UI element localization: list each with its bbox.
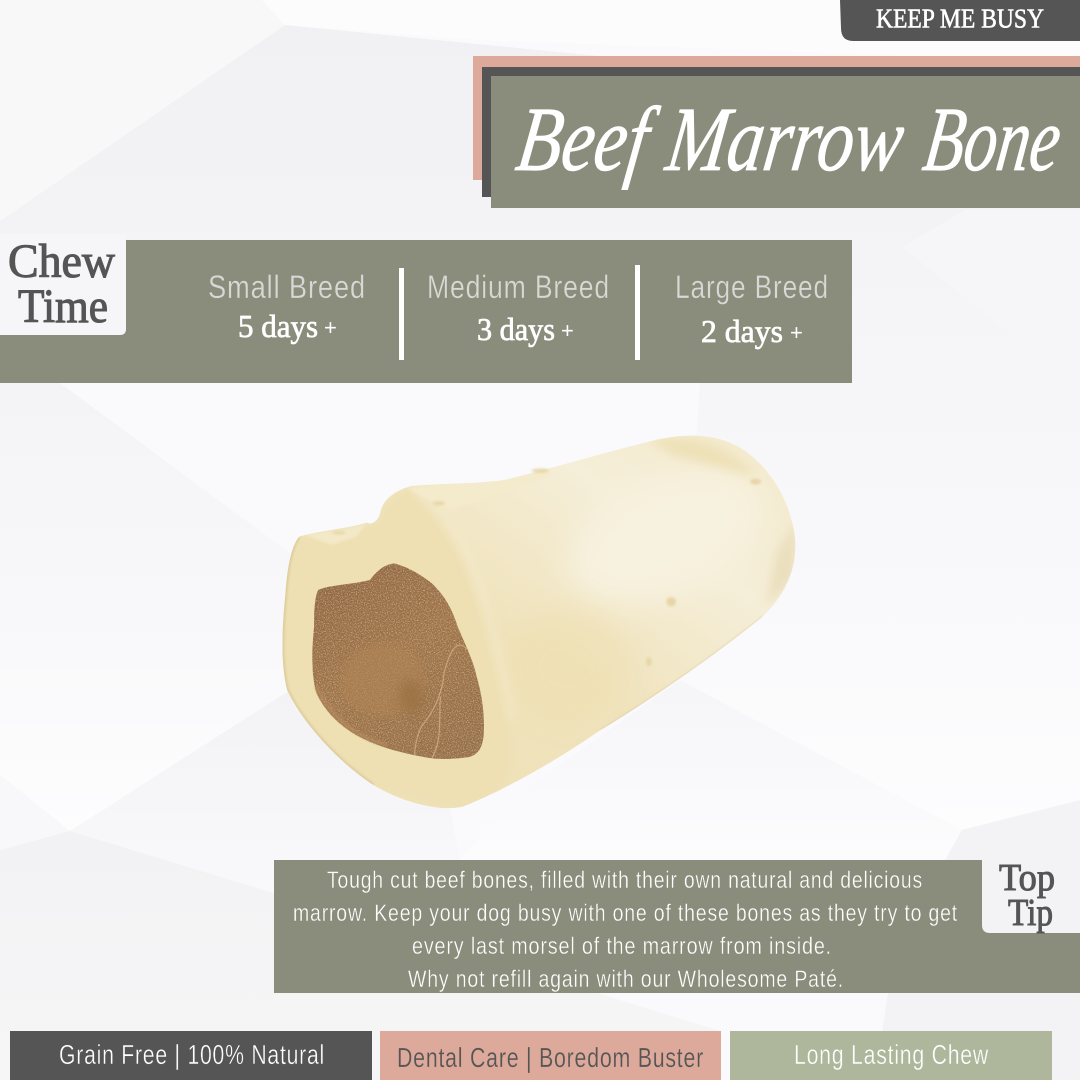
cut face of the bone (277, 486, 511, 810)
badge: long lasting chew: Long Lasting Chew (794, 1039, 989, 1070)
description text: Tough cut beef bones, filled with their own natural and delicious (327, 867, 923, 894)
badge: long lasting chew (730, 1031, 1052, 1080)
marrow (312, 563, 484, 759)
badge: dental care (380, 1031, 721, 1080)
top rough edge (410, 474, 547, 494)
bone flecks (332, 469, 761, 666)
soft rim on the left (282, 537, 373, 785)
title text: Marrow (660, 88, 910, 190)
medium breed: 3 days (477, 311, 555, 347)
medium breed: + (561, 318, 575, 343)
medium breed (427, 269, 610, 347)
top tip heading: Tip (1008, 892, 1053, 934)
tag: keep me busy (840, 0, 1080, 41)
badge: grain free (10, 1031, 372, 1080)
medium breed: Medium Breed (427, 269, 610, 305)
chew time tab: Time (18, 280, 108, 333)
chew time tab: Chew (8, 235, 115, 288)
large breed: + (790, 320, 804, 345)
description text: every last morsel of the marrow from inside. (412, 933, 832, 960)
small breed: Small Breed (208, 269, 366, 305)
shading on the bone body (538, 436, 796, 730)
rim highlight (415, 490, 513, 720)
large breed: 2 days (701, 313, 783, 349)
panel: top tip (274, 857, 1080, 993)
divider (635, 265, 640, 360)
small breed: 5 days (238, 308, 318, 344)
large breed: Large Breed (675, 269, 829, 305)
badge: dental care: Dental Care | Boredom Buster (397, 1042, 704, 1073)
divider (399, 268, 404, 360)
title text: Beef (511, 88, 664, 190)
title banner (473, 56, 1080, 208)
small breed (208, 269, 366, 344)
large breed (675, 269, 829, 349)
tag: keep me busy: KEEP ME BUSY (876, 4, 1044, 34)
chew time tab (0, 234, 126, 335)
badge: grain free: Grain Free | 100% Natural (59, 1039, 325, 1070)
title text (511, 88, 1067, 190)
top tip heading (999, 857, 1055, 934)
illustration: beef marrow bone (282, 436, 796, 808)
top tip heading: Top (999, 857, 1055, 899)
small breed: + (324, 315, 338, 340)
description text (293, 867, 958, 993)
panel: chew time (0, 234, 852, 383)
description text: Why not refill again with our Wholesome Paté. (408, 966, 844, 993)
